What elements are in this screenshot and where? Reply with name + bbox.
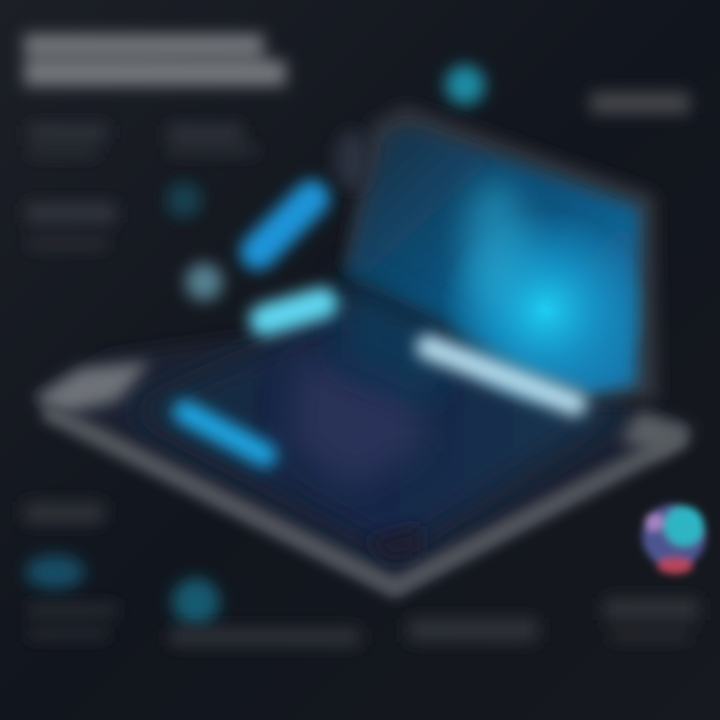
laptop base bbox=[32, 300, 695, 592]
icon: colorful logo bbox=[642, 504, 706, 574]
laptop screen bbox=[340, 105, 658, 410]
text block: upper left labels bbox=[26, 125, 258, 248]
pill: cyan lower bbox=[185, 412, 265, 455]
title bbox=[24, 34, 286, 86]
pill: white highlight bbox=[428, 347, 575, 404]
icon: dark teal dot bbox=[166, 182, 202, 218]
pill: blue floating bbox=[258, 198, 312, 252]
icon: teal lower center bbox=[172, 578, 220, 626]
dark floating shape bbox=[334, 130, 370, 190]
icon: teal lower left bbox=[25, 555, 85, 589]
text block: lower labels bbox=[24, 502, 699, 646]
icon: circle grey blue bbox=[185, 263, 223, 301]
icon: teal dot top bbox=[445, 65, 485, 105]
pill: light cyan bbox=[265, 303, 322, 320]
text block: upper right label bbox=[590, 92, 690, 114]
